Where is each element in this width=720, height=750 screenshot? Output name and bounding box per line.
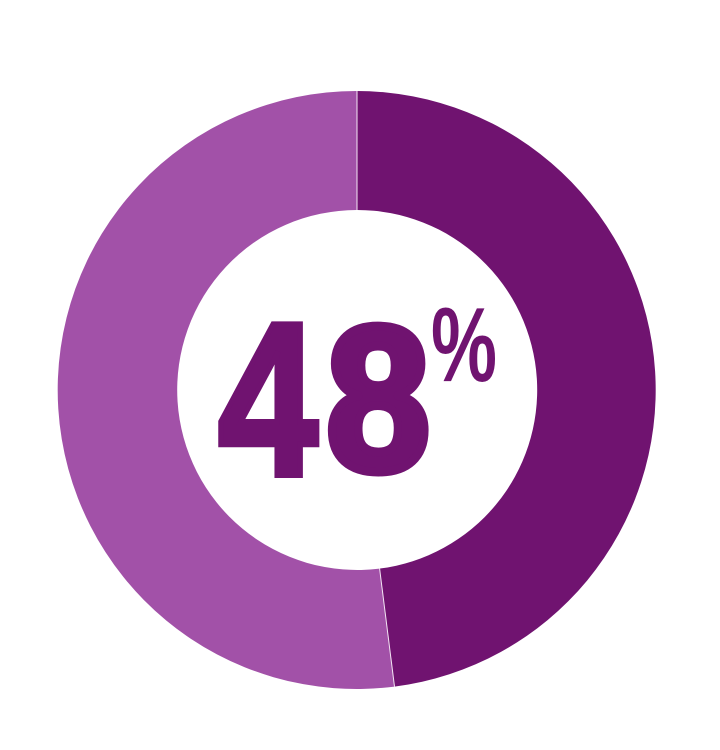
percent sign: % bbox=[431, 286, 497, 404]
donut segment: remaining 52% bbox=[58, 91, 395, 689]
donut segment: 48% bbox=[357, 91, 656, 687]
segment separator lines bbox=[357, 91, 394, 687]
value: 48: 4 bbox=[218, 278, 318, 522]
value: 48: 8 bbox=[326, 284, 430, 514]
value: 48 bbox=[218, 278, 430, 522]
